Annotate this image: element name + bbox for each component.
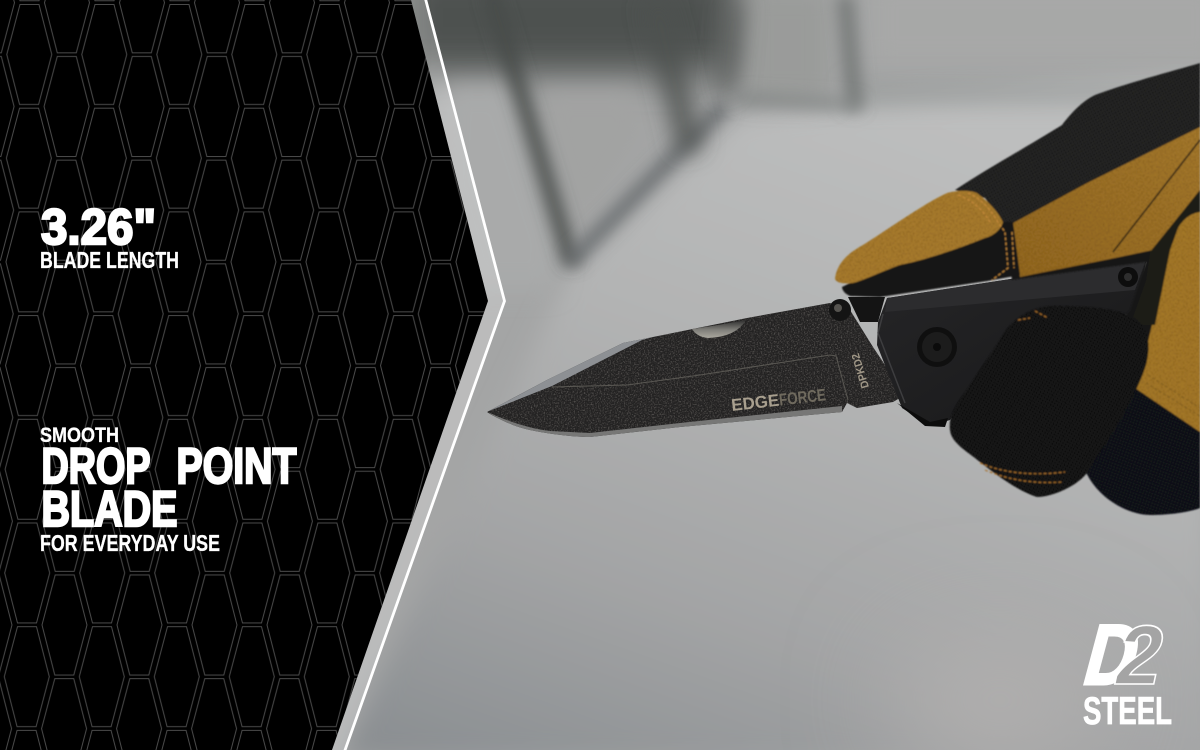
fingertip black underside	[842, 222, 1020, 297]
everyday use label: FOR EVERYDAY USE	[40, 530, 220, 556]
blade length label: BLADE LENGTH	[40, 247, 179, 273]
seam line	[1113, 140, 1200, 252]
lower liner	[897, 403, 948, 427]
black hexagon-pattern panel	[0, 0, 500, 750]
outlined 2 numeral: 2	[1108, 608, 1173, 702]
small screw	[1118, 267, 1138, 287]
edgeforce logo	[730, 385, 827, 415]
knife handle	[829, 258, 1147, 427]
edgeforce logo: EDGE	[730, 391, 780, 415]
knife blade	[487, 303, 905, 437]
thumb cut	[692, 320, 746, 338]
text: blade description	[40, 424, 296, 556]
drop point heading line: POINT	[176, 438, 296, 494]
pivot pin	[829, 299, 851, 321]
cutting edge bevel	[488, 406, 842, 437]
tan back panel	[1013, 127, 1200, 277]
white chevron border line	[344, 0, 504, 750]
dark glove base	[1005, 130, 1200, 280]
grind line	[552, 355, 848, 400]
palm stitching	[1146, 375, 1200, 416]
right tan palm	[1135, 205, 1200, 432]
dark base behind thumb	[1090, 200, 1200, 470]
lower mesh palm	[1085, 388, 1200, 515]
handle top strip	[885, 258, 1147, 312]
panel edge highlight	[878, 314, 905, 403]
D2 steel badge	[1075, 608, 1173, 733]
D letter: D	[1075, 608, 1150, 703]
thumb	[950, 306, 1148, 497]
glove	[835, 63, 1200, 515]
frosted band beside panel	[332, 0, 505, 750]
knife photo illustration	[487, 63, 1200, 515]
text: blade length	[40, 199, 179, 273]
black mesh back of finger	[955, 63, 1200, 225]
blade heading line: BLADE	[42, 481, 178, 537]
thumb stitching	[980, 311, 1065, 482]
handle screw	[917, 327, 957, 367]
smooth label: SMOOTH	[40, 424, 119, 447]
drop point heading line: DROP	[42, 438, 150, 494]
fingertip tan suede	[835, 191, 1003, 283]
blade length value: 3.26"	[41, 199, 156, 255]
model code: DPKD2	[850, 352, 872, 390]
fingertip stitching	[958, 193, 1014, 280]
drop point heading line	[42, 438, 296, 494]
black strap	[1130, 190, 1200, 325]
spine bevel	[489, 337, 653, 411]
edgeforce logo: FORCE	[778, 385, 827, 410]
